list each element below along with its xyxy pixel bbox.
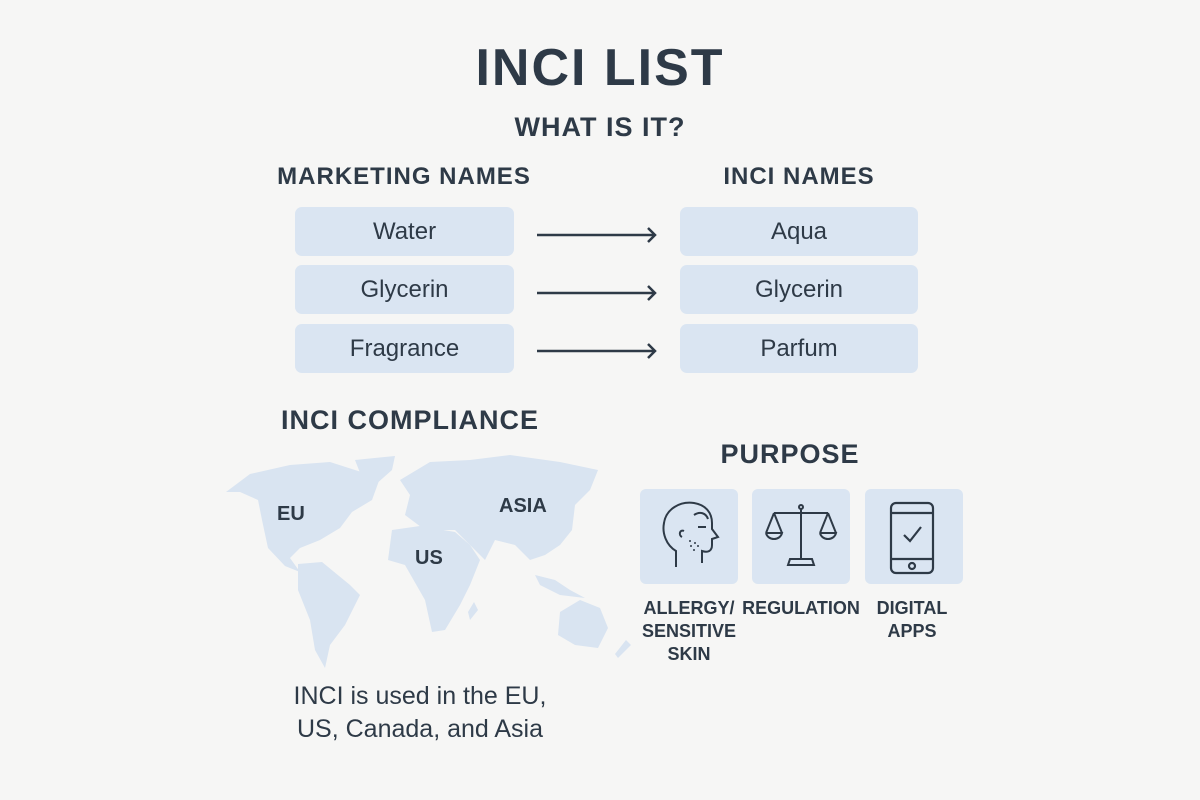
box: aqua: Aqua: [771, 218, 827, 245]
madagascar: [468, 602, 478, 620]
label: allergy: SKIN: [667, 644, 710, 664]
box: glycerin: Glycerin: [755, 276, 843, 303]
north america: [226, 462, 380, 572]
new zealand: [615, 640, 631, 658]
map label US: US: [415, 547, 443, 569]
label: allergy: [642, 598, 736, 664]
label: allergy: SENSITIVE: [642, 621, 736, 641]
marketing name boxes: [295, 207, 514, 373]
box: parfum: Parfum: [760, 335, 838, 362]
box: water: Water: [373, 218, 436, 245]
box: glycerin: [295, 265, 514, 314]
title: INCI LIST: [475, 39, 725, 97]
south america: [298, 562, 360, 668]
icon: phone: [865, 489, 963, 584]
box: aqua: [680, 207, 918, 256]
arrow 3: [537, 344, 655, 358]
box: fragrance: Fragrance: [350, 335, 459, 362]
inci name boxes: [680, 207, 918, 373]
arrow 2: [537, 286, 655, 300]
heading: inci names: INCI NAMES: [723, 163, 875, 190]
heading: purpose: PURPOSE: [720, 439, 860, 469]
arrow 1: [537, 228, 655, 242]
australia: [558, 600, 608, 648]
label: digital apps: [877, 598, 947, 641]
map label EU: EU: [277, 503, 305, 525]
label: allergy: ALLERGY/: [643, 598, 734, 618]
heading: inci compliance: INCI COMPLIANCE: [281, 405, 539, 435]
caption: [294, 682, 546, 743]
box: glycerin: [680, 265, 918, 314]
eurasia: [400, 455, 598, 560]
africa: [388, 526, 480, 632]
heading: marketing names: MARKETING NAMES: [277, 163, 531, 190]
caption: INCI is used in the EU,: [294, 682, 546, 710]
arrows: [537, 227, 657, 359]
caption: US, Canada, and Asia: [297, 715, 543, 743]
greenland: [355, 456, 395, 485]
label: digital apps: APPS: [887, 621, 937, 641]
box: fragrance: [295, 324, 514, 373]
map label ASIA: ASIA: [499, 495, 547, 517]
se asia islands: [535, 575, 585, 598]
label: digital apps: DIGITAL: [877, 598, 947, 618]
icon: scales: [752, 489, 850, 584]
box: water: [295, 207, 514, 256]
label: regulation: REGULATION: [742, 598, 860, 618]
box: glycerin: Glycerin: [360, 276, 449, 303]
box: parfum: [680, 324, 918, 373]
subtitle: WHAT IS IT?: [514, 112, 685, 142]
icon: face allergy: [640, 489, 738, 584]
